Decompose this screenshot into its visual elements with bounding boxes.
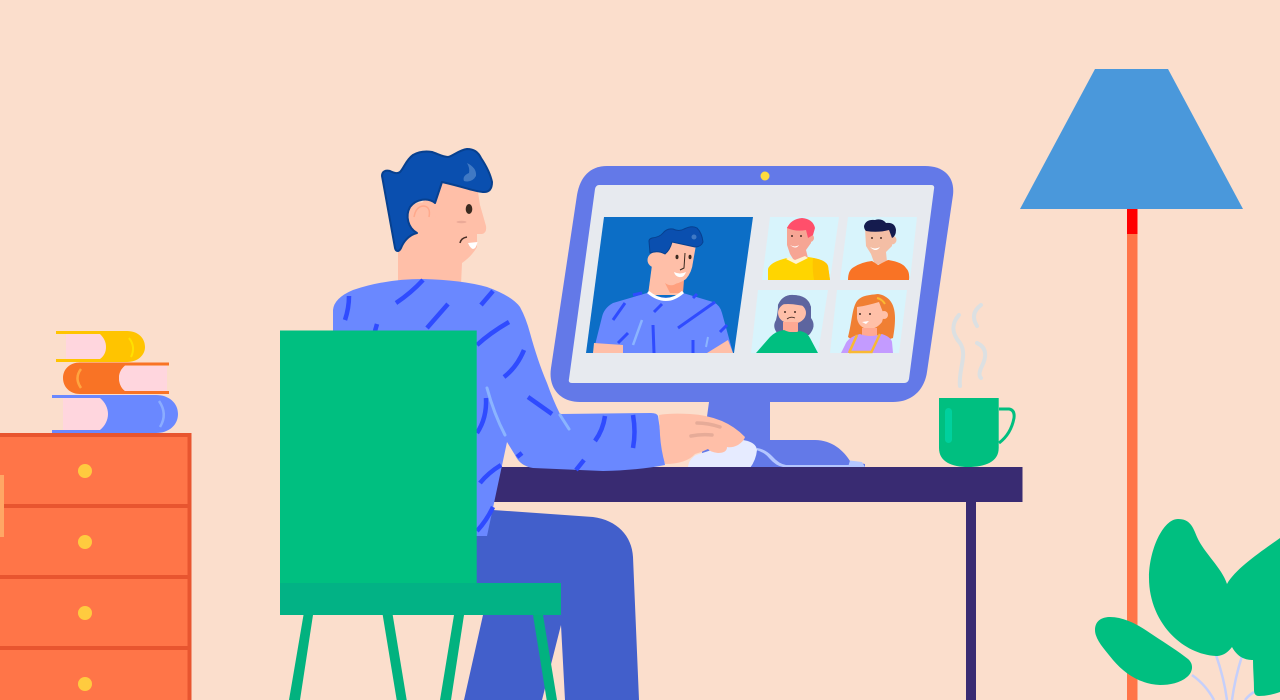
desk leg xyxy=(966,500,976,700)
book: orange xyxy=(63,362,169,394)
green chair xyxy=(280,330,561,700)
book: yellow xyxy=(56,331,145,362)
hair highlight xyxy=(464,163,476,181)
monitor frame xyxy=(551,166,953,402)
potted plant leaves xyxy=(1095,519,1280,700)
orange drawer cabinet xyxy=(0,433,192,700)
cheek mark xyxy=(456,221,466,223)
monitor stand xyxy=(700,395,865,467)
stack of books xyxy=(52,331,178,433)
book: blue xyxy=(52,395,178,433)
floor lamp xyxy=(1020,69,1243,700)
sweater xyxy=(333,279,665,536)
chair back xyxy=(280,330,477,583)
green coffee mug xyxy=(939,305,1014,467)
mouth xyxy=(460,237,478,249)
video tile: woman with red hair xyxy=(830,290,907,353)
eye xyxy=(466,204,472,214)
computer monitor xyxy=(551,166,953,467)
man at desk xyxy=(333,149,745,700)
ear xyxy=(406,202,436,232)
video tile: man in orange shirt xyxy=(840,217,917,280)
chair seat xyxy=(280,583,561,615)
neck and face xyxy=(398,182,486,285)
trousers xyxy=(460,508,639,700)
sweater dashes xyxy=(345,280,634,531)
desk top xyxy=(480,467,1022,502)
monitor screen xyxy=(569,185,934,383)
video tile: main man xyxy=(586,217,753,353)
hair xyxy=(382,149,492,251)
webcam dot xyxy=(760,172,770,180)
hand on mouse xyxy=(659,414,745,464)
computer mouse and cable xyxy=(688,440,850,468)
video tile: man in yellow sweater xyxy=(762,217,839,280)
chair legs xyxy=(289,615,557,700)
steam xyxy=(953,305,985,386)
video tile: woman in green top xyxy=(751,290,828,353)
